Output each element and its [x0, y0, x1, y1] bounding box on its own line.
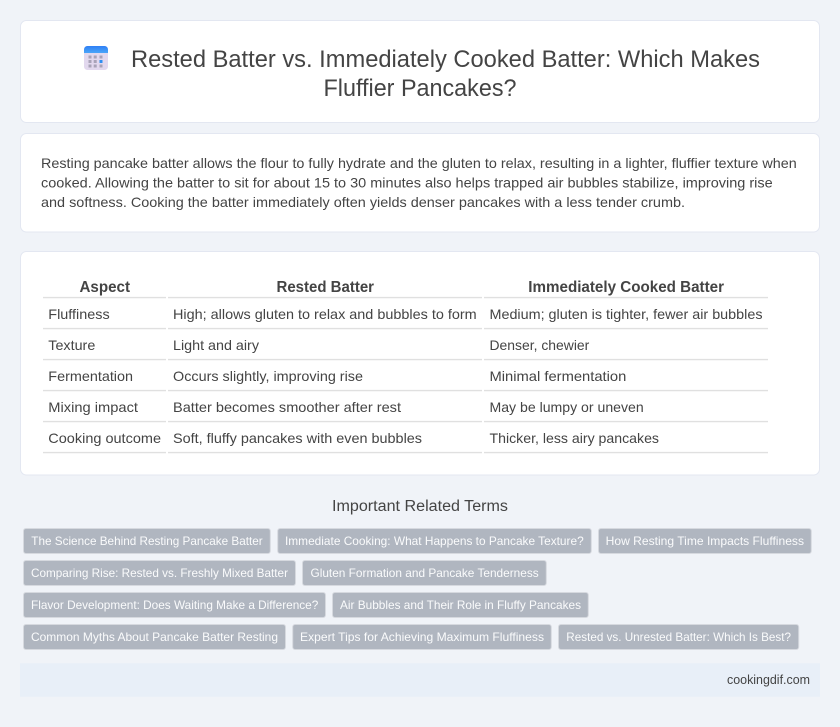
- tag: Flavor Development: Does Waiting Make a Difference?: [31, 598, 319, 612]
- tag: Comparing Rise: Rested vs. Freshly Mixed Batter: [31, 566, 288, 580]
- text block: introduction: [41, 155, 797, 210]
- table row: cooking outcome: [48, 430, 659, 446]
- text block: introduction: Resting pancake batter allows the flour to fully hydrate and the gluten to relax, resulting in a lighter, fluffier texture when: [41, 155, 797, 171]
- title: Fluffier Pancakes?: [324, 75, 516, 102]
- tag: Expert Tips for Achieving Maximum Fluffiness: [300, 630, 544, 644]
- tag: [24, 560, 296, 586]
- tag: [598, 528, 811, 554]
- table row: mixing impact: Mixing impact: [48, 399, 138, 415]
- tag: How Resting Time Impacts Fluffiness: [606, 534, 804, 548]
- table row: fluffiness: High; allows gluten to relax and bubbles to form: [173, 306, 477, 322]
- tag: [302, 560, 546, 586]
- title: [131, 46, 760, 102]
- panel: header: [20, 20, 820, 122]
- table row: fluffiness: [48, 306, 763, 322]
- heading: important related terms: Important Related Terms: [332, 498, 508, 515]
- table header row: Immediately Cooked Batter: [528, 279, 724, 296]
- tag: Immediate Cooking: What Happens to Pancake Texture?: [285, 534, 584, 548]
- table row: fermentation: Minimal fermentation: [490, 368, 626, 384]
- table row: cooking outcome: Cooking outcome: [48, 430, 161, 446]
- text block: introduction: cooked. Allowing the batter to sit for about 15 to 30 minutes also helps trapped air bubbles stabilize, improving rise: [41, 174, 773, 190]
- tag: [332, 592, 588, 618]
- tag: [24, 592, 326, 618]
- table row: texture: Light and airy: [173, 337, 259, 353]
- footer: cookingdif.com: [727, 673, 810, 687]
- tag: [293, 624, 551, 650]
- tag: Gluten Formation and Pancake Tenderness: [310, 566, 539, 580]
- table row: fermentation: Occurs slightly, improving rise: [173, 368, 363, 384]
- table row: fermentation: Fermentation: [48, 368, 133, 384]
- table row: mixing impact: Batter becomes smoother after rest: [173, 399, 401, 415]
- tag: Rested vs. Unrested Batter: Which Is Best?: [566, 630, 791, 644]
- table row: mixing impact: May be lumpy or uneven: [490, 399, 644, 415]
- icon: calendar: [84, 46, 108, 70]
- table row: texture: Denser, chewier: [490, 337, 590, 353]
- tag: [24, 528, 270, 554]
- table row: texture: [48, 337, 590, 353]
- panel: comparison table: [20, 252, 820, 475]
- panel: introduction: [20, 134, 820, 232]
- table rule lines: [43, 298, 768, 453]
- table row: fermentation: [48, 368, 626, 384]
- tag: Common Myths About Pancake Batter Resting: [31, 630, 278, 644]
- title: Rested Batter vs. Immediately Cooked Batter: Which Makes: [131, 46, 760, 73]
- tag: [558, 624, 799, 650]
- table header row: Rested Batter: [276, 279, 374, 296]
- footer: [20, 663, 820, 697]
- tag: Air Bubbles and Their Role in Fluffy Pancakes: [340, 598, 581, 612]
- tag: [24, 624, 286, 650]
- table row: texture: Texture: [48, 337, 96, 353]
- text block: introduction: and softness. Cooking the batter immediately often yields denser pancakes with a less tender crumb.: [41, 194, 685, 210]
- table row: fluffiness: Fluffiness: [48, 306, 110, 322]
- table header row: Aspect: [80, 279, 130, 296]
- tag list: related terms: [24, 528, 811, 650]
- tag: [278, 528, 591, 554]
- tag: The Science Behind Resting Pancake Batter: [31, 534, 263, 548]
- table row: mixing impact: [48, 399, 644, 415]
- table row: cooking outcome: Thicker, less airy pancakes: [490, 430, 659, 446]
- table row: cooking outcome: Soft, fluffy pancakes with even bubbles: [173, 430, 422, 446]
- table row: fluffiness: Medium; gluten is tighter, fewer air bubbles: [490, 306, 762, 322]
- table header row: [80, 279, 724, 296]
